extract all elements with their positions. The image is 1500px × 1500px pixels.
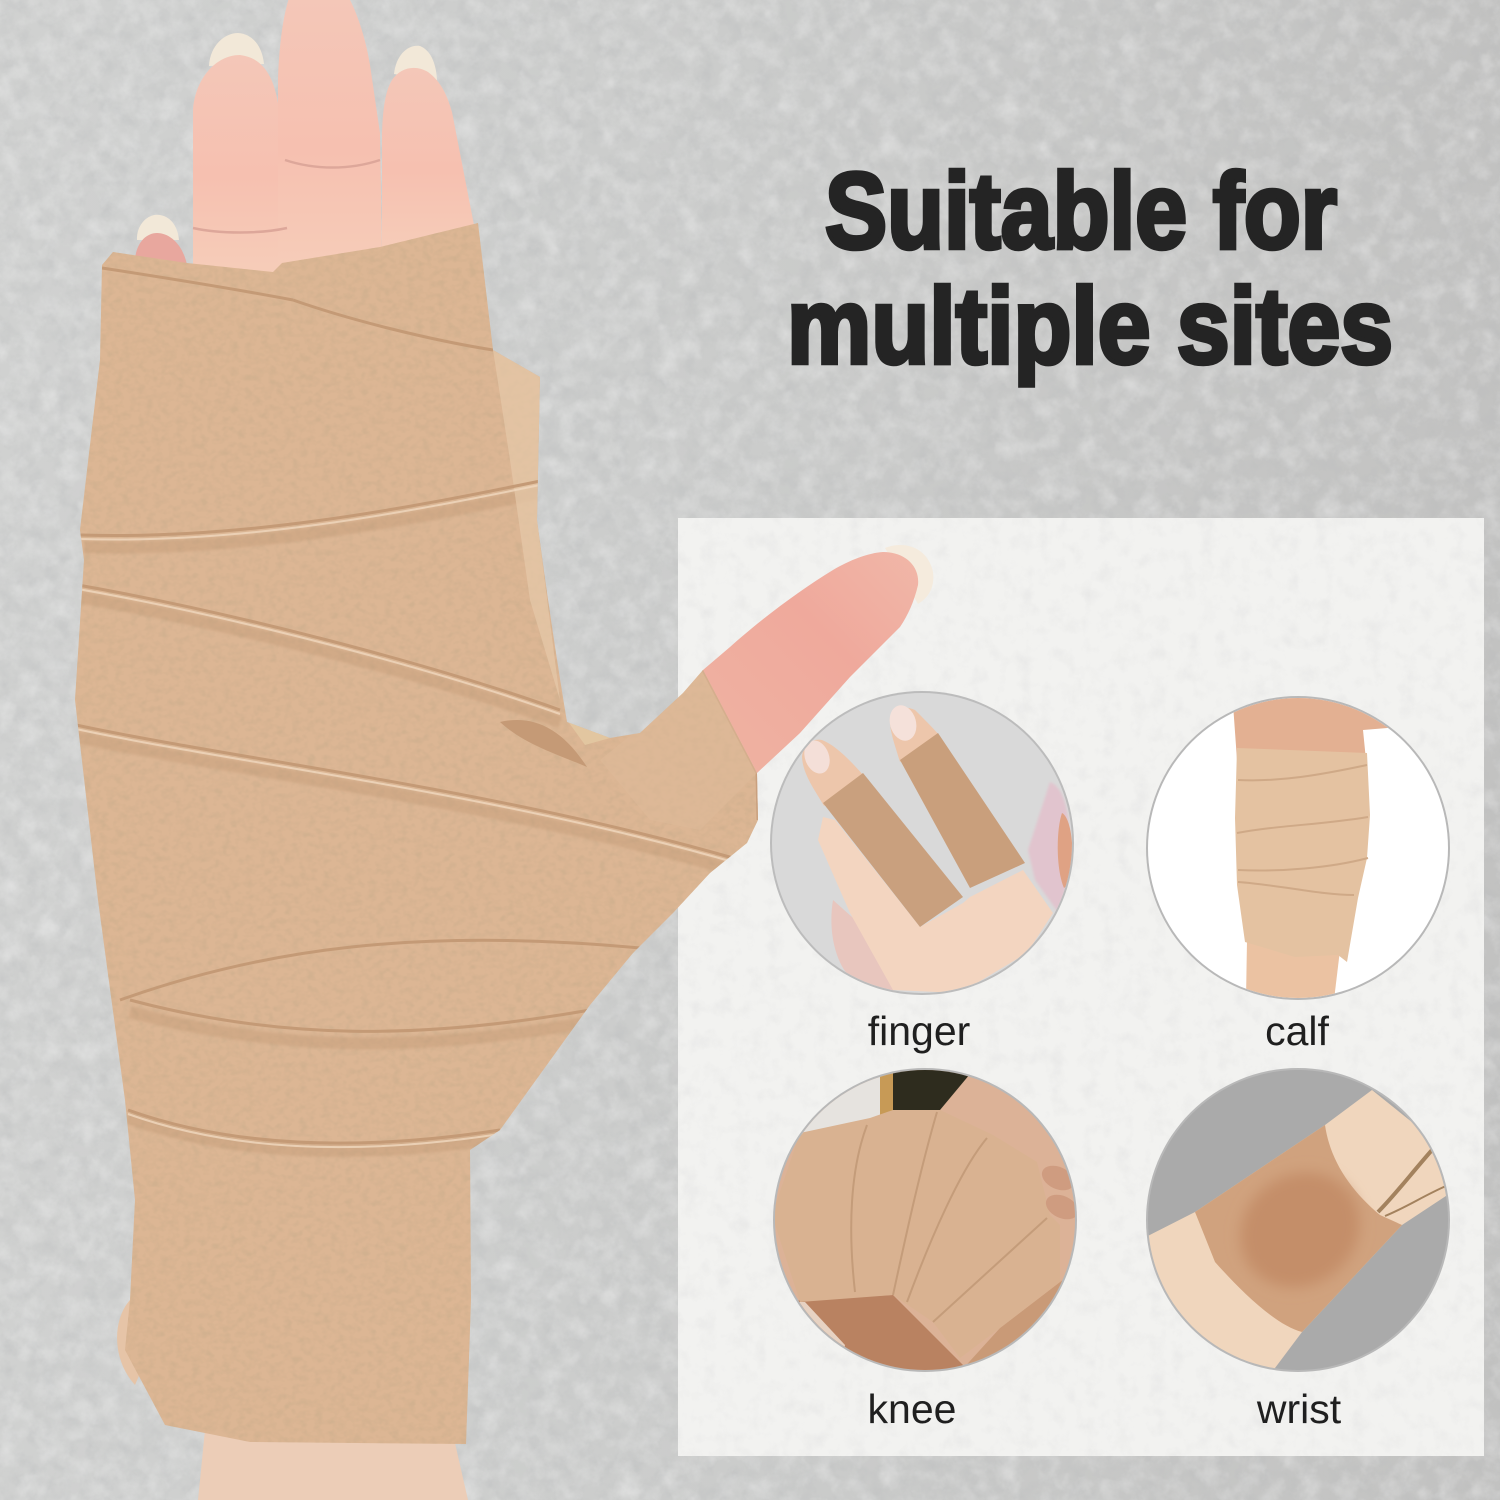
circle: knee xyxy=(772,1068,1082,1372)
palm fold xyxy=(500,720,587,767)
label: finger: finger xyxy=(868,1008,970,1054)
background behind knee xyxy=(802,1077,880,1134)
circle: calf xyxy=(1146,690,1450,1000)
index xyxy=(382,68,474,255)
finger bandages xyxy=(823,773,963,927)
bandage body xyxy=(60,210,780,1460)
shadows under overlaps xyxy=(76,492,740,1151)
wrist creases xyxy=(1378,1150,1446,1216)
gauze edge at right of hand xyxy=(493,350,560,700)
heading: Suitable for xyxy=(825,150,1337,271)
fingers xyxy=(135,0,474,275)
heading: multiple sites xyxy=(787,265,1393,386)
finger tips xyxy=(802,740,864,806)
thumb xyxy=(703,545,933,773)
creases xyxy=(193,160,380,232)
ring xyxy=(209,33,264,66)
wrist bandage xyxy=(1195,1125,1402,1332)
label: knee: knee xyxy=(868,1386,956,1432)
panel: white application sites xyxy=(678,518,1484,1456)
heading xyxy=(787,150,1393,386)
wrap overlaps xyxy=(76,268,740,1143)
thumb wrap seam xyxy=(703,670,758,820)
left bandage flap xyxy=(117,1300,150,1385)
skin under knee xyxy=(798,1295,963,1370)
circle: wrist xyxy=(1140,1068,1455,1372)
blurred pink object at right xyxy=(1028,782,1069,915)
middle xyxy=(278,0,382,275)
wrist skin xyxy=(198,1430,468,1500)
rear finger xyxy=(832,900,894,990)
supporting fingers xyxy=(1042,1166,1072,1190)
circle: finger xyxy=(770,690,1080,1000)
knee bandage xyxy=(775,1110,940,1302)
label: wrist: wrist xyxy=(1256,1386,1342,1432)
photo: bandaged hand xyxy=(60,0,933,1500)
label: calf: calf xyxy=(1265,1008,1330,1054)
nails xyxy=(804,740,830,774)
pinky xyxy=(137,215,179,240)
arm xyxy=(1140,1090,1455,1372)
index nail xyxy=(394,46,437,80)
palm and knuckles xyxy=(818,817,1053,993)
